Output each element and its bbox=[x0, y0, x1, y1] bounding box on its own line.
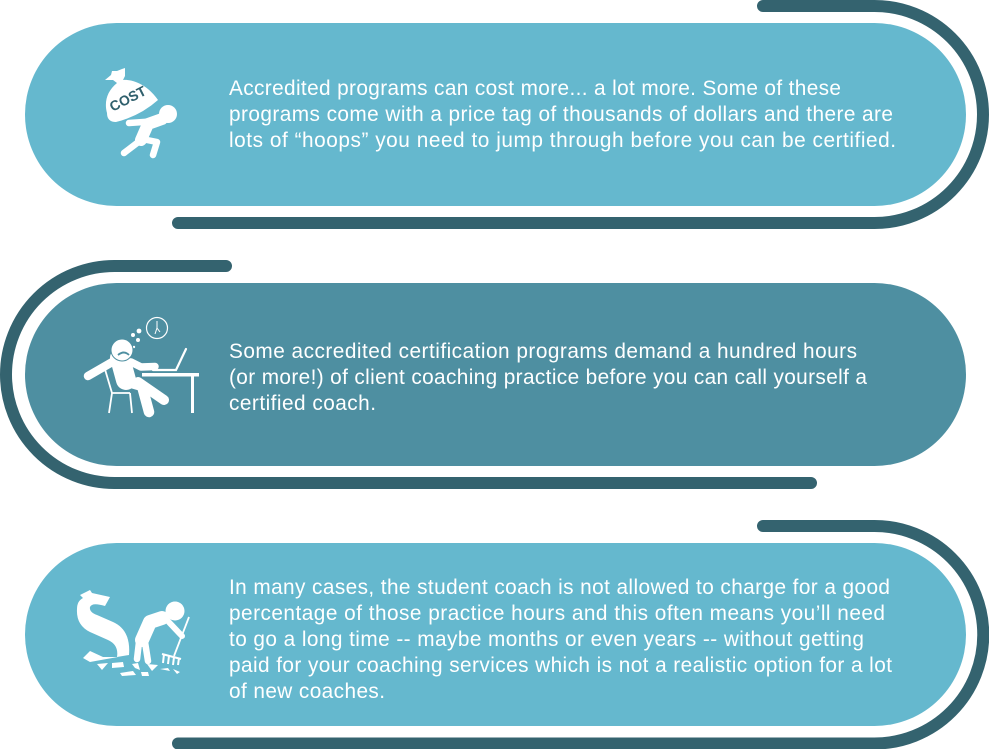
pill background: cost panel bbox=[25, 23, 966, 206]
text: time description bbox=[229, 340, 867, 415]
text: cost description: Accredited programs can cost more... a lot more. Some of these bbox=[229, 77, 841, 100]
panel: unpaid bbox=[25, 526, 983, 744]
text: time description: certified coach. bbox=[229, 392, 376, 415]
text: time description: Some accredited certification programs demand a hundred hours bbox=[229, 340, 857, 363]
panel: time bbox=[6, 266, 966, 483]
icon: person carrying cost bag bbox=[105, 68, 177, 155]
text: cost description: programs come with a price tag of thousands of dollars and there are bbox=[229, 103, 893, 126]
pill background: time panel bbox=[25, 283, 966, 466]
icon: person carrying cost bag: COST bbox=[107, 82, 149, 115]
icon: tired person at laptop bbox=[88, 318, 199, 413]
text: time description: (or more!) of client coaching practice before you can call yourself a bbox=[229, 366, 867, 389]
outer arc: unpaid panel bbox=[178, 526, 983, 744]
text: unpaid description: percentage of those practice hours and this often means you’ll need bbox=[229, 602, 885, 625]
text: unpaid description: of new coaches. bbox=[229, 680, 385, 703]
text: unpaid description: paid for your coaching services which is not a realistic option for a lot bbox=[229, 654, 892, 677]
text: cost description bbox=[229, 77, 896, 152]
pill background: unpaid panel bbox=[25, 543, 966, 726]
text: unpaid description: to go a long time -- maybe months or even years -- without getting bbox=[229, 628, 864, 651]
outer arc: cost panel bbox=[178, 6, 983, 223]
outer arc: time panel bbox=[6, 266, 811, 483]
panel: cost bbox=[25, 6, 983, 223]
icon: broken dollar sign and person raking bbox=[77, 590, 189, 676]
text: unpaid description: In many cases, the student coach is not allowed to charge for a good bbox=[229, 576, 890, 599]
text: cost description: lots of “hoops” you need to jump through before you can be certified. bbox=[229, 129, 896, 152]
text: unpaid description bbox=[229, 576, 892, 703]
